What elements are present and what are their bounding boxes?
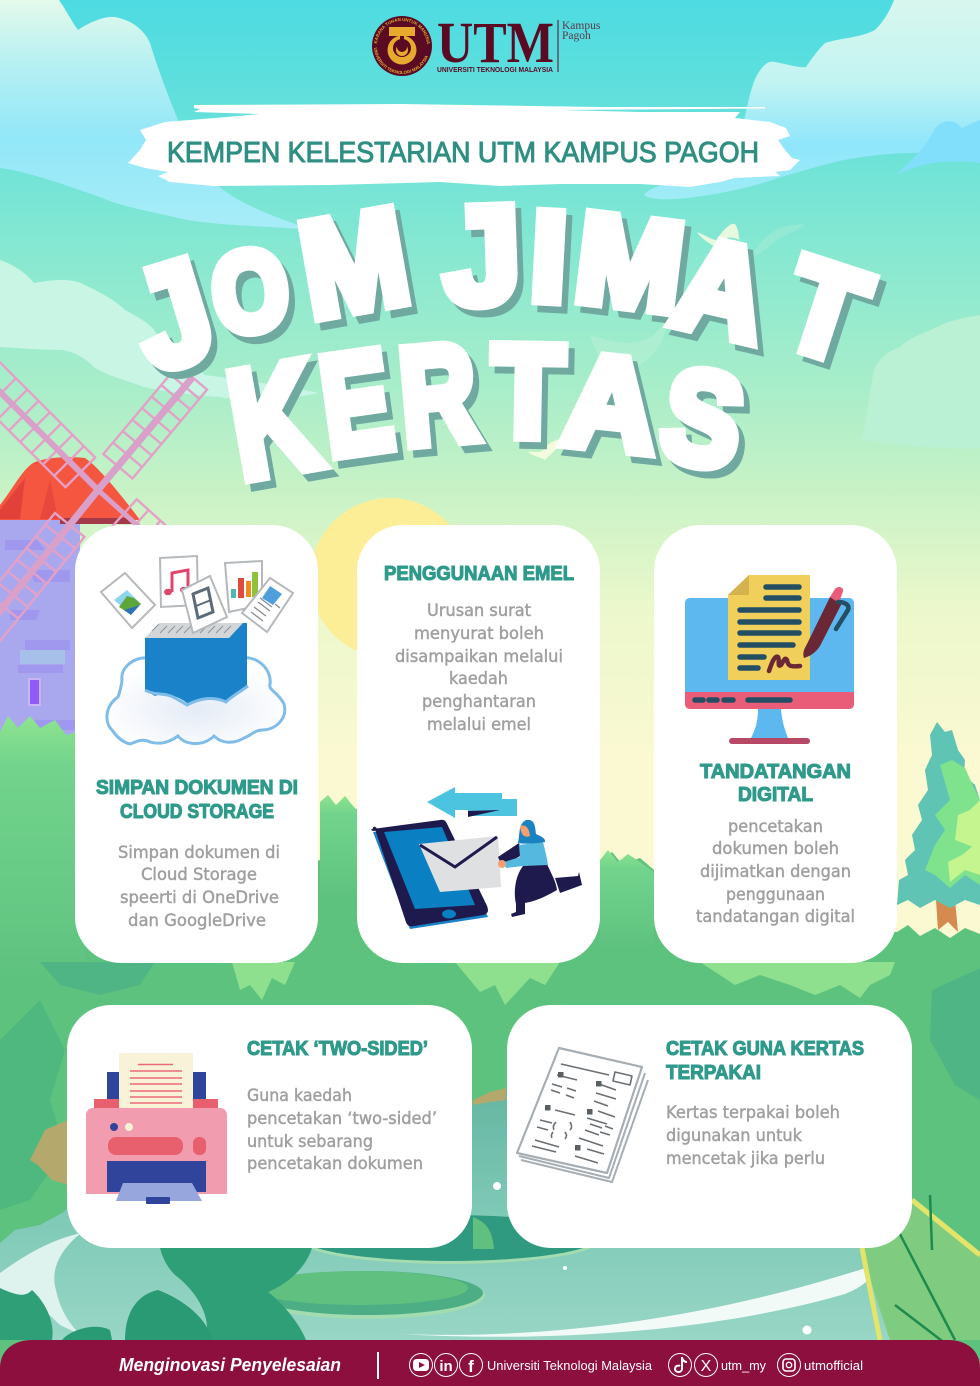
background: sun — [310, 498, 470, 658]
heading: PENGGUNAAN EMEL — [384, 563, 574, 585]
main title: JOM JIMAT KERTAS: E — [312, 321, 401, 487]
main title: JOM JIMAT KERTAS: K — [217, 327, 330, 512]
body text: Guna kaedah — [247, 1086, 352, 1105]
panel: two-sided printing — [67, 1005, 472, 1248]
background: foreground leaves — [0, 1195, 980, 1370]
body text: dijimatkan dengan — [700, 862, 851, 881]
heading — [96, 777, 298, 823]
heading: DIGITAL — [738, 784, 813, 806]
logo crest: KARANA TUHAN UNTUK MANUSIA — [374, 18, 430, 44]
logo campus name: Kampus — [562, 20, 601, 32]
panel: digital signature — [654, 525, 897, 963]
body text: mencetak jika perlu — [666, 1149, 825, 1168]
body text: Urusan surat — [427, 601, 532, 620]
body text: Simpan dokumen di — [118, 843, 280, 862]
logo divider — [558, 20, 559, 72]
body text: Kertas terpakai boleh — [666, 1103, 840, 1122]
heading: CLOUD STORAGE — [120, 801, 274, 823]
body text: speerti di OneDrive — [120, 888, 279, 907]
social icons and handles: f — [468, 1357, 474, 1376]
main title: JOM JIMAT KERTAS: J — [114, 228, 230, 401]
logo wordmark: UTM — [437, 10, 554, 75]
background: river — [0, 1090, 980, 1340]
heading: CETAK ‘TWO-SIDED’ — [247, 1038, 428, 1060]
heading: TERPAKAI — [666, 1062, 761, 1084]
social icons and handles: utmofficial — [804, 1358, 863, 1373]
body text: pencetakan — [728, 817, 823, 836]
background: lily pads — [249, 1215, 600, 1319]
logo: UTM Kampus Pagoh — [372, 10, 601, 76]
background: brown riverbank — [30, 1088, 506, 1185]
body text: digunakan untuk — [666, 1126, 802, 1145]
logo crest — [372, 16, 432, 76]
body text — [247, 1086, 437, 1173]
banner: campaign title — [128, 104, 800, 187]
body text: kaedah — [449, 669, 508, 688]
background: white water streaks — [0, 1182, 878, 1337]
paper: newspaper — [242, 578, 293, 632]
body text: dokumen boleh — [712, 839, 839, 858]
main title: JOM JIMAT KERTAS: T — [768, 229, 884, 391]
icon: stack of used paper — [517, 1048, 648, 1182]
main title: JOM JIMAT KERTAS: J — [441, 178, 523, 334]
paper: chart — [225, 561, 262, 612]
paper: music — [160, 556, 198, 607]
campaign title text: KEMPEN KELESTARIAN UTM KAMPUS PAGOH — [167, 137, 759, 169]
main title: JOM JIMAT KERTAS — [114, 178, 884, 512]
paper: film — [182, 576, 227, 633]
logo campus name: Pagoh — [562, 30, 591, 42]
heading: SIMPAN DOKUMEN DI — [96, 777, 298, 799]
paper: picture — [101, 573, 155, 628]
main title: JOM JIMAT KERTAS: M — [290, 179, 419, 347]
slogan: Menginovasi Penyelesaian — [119, 1355, 341, 1375]
body text — [395, 601, 563, 734]
social icons and handles: Universiti Teknologi Malaysia — [487, 1358, 653, 1373]
main title: JOM JIMAT KERTAS: O — [205, 225, 295, 359]
social icons and handles: X — [701, 1358, 712, 1375]
body text: tandatangan digital — [696, 907, 855, 926]
panel: cloud storage — [75, 525, 318, 963]
brush stroke — [128, 104, 800, 187]
body text: menyurat boleh — [414, 624, 544, 643]
body text: pencetakan dokumen — [247, 1154, 423, 1173]
body text: melalui emel — [427, 715, 531, 734]
heading: CETAK GUNA KERTAS — [666, 1038, 864, 1060]
main title: JOM JIMAT KERTAS: A — [662, 208, 781, 370]
social icons and handles: utm_my — [721, 1358, 766, 1373]
main title: JOM JIMAT KERTAS: M — [569, 186, 691, 339]
illustration: tree — [897, 722, 980, 932]
icon: monitor with signed document — [685, 575, 854, 744]
body text — [666, 1103, 840, 1168]
heading — [666, 1038, 864, 1084]
social icons and handles: in — [439, 1358, 453, 1375]
logo crest: UNIVERSITI TEKNOLOGI MALAYSIA — [374, 48, 428, 74]
body text: Cloud Storage — [141, 865, 257, 884]
icon: documents in cloud storage — [101, 556, 293, 744]
body text: untuk sebarang — [247, 1132, 373, 1151]
body text: disampaikan melalui — [395, 647, 563, 666]
main title: JOM JIMAT KERTAS: R — [394, 314, 483, 474]
background: clouds — [0, 0, 980, 460]
icon: person sending email from tablet — [373, 787, 582, 929]
body text: dan GoogleDrive — [128, 911, 266, 930]
heading — [700, 761, 851, 806]
body text — [118, 843, 280, 930]
body text: penggunaan — [726, 885, 825, 904]
main title: JOM JIMAT KERTAS: T — [491, 319, 565, 465]
footer bar — [0, 1340, 980, 1386]
social icons and handles — [410, 1354, 863, 1376]
main title: JOM JIMAT KERTAS: A — [557, 326, 664, 481]
body text: pencetakan ‘two-sided’ — [247, 1109, 437, 1128]
background: ground and hedges — [0, 716, 980, 1386]
body text — [696, 817, 855, 926]
panel: email — [357, 525, 600, 963]
illustration: windmill — [0, 362, 207, 760]
main title: JOM JIMAT KERTAS: I — [528, 185, 570, 328]
footer divider — [377, 1352, 379, 1379]
logo university name: UNIVERSITI TEKNOLOGI MALAYSIA — [437, 65, 554, 74]
panel: reuse paper — [507, 1005, 912, 1248]
icon: printer — [86, 1053, 227, 1204]
main title: JOM JIMAT KERTAS: S — [652, 339, 754, 498]
heading: TANDATANGAN — [700, 761, 851, 783]
body text: penghantaran — [422, 692, 536, 711]
